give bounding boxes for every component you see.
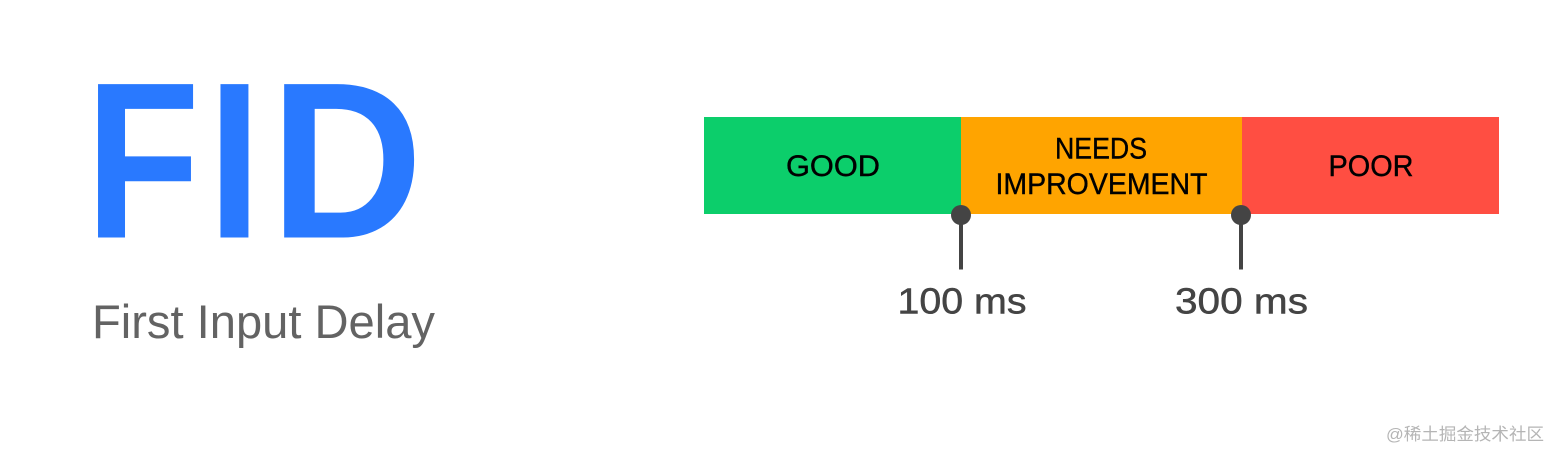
title: FID	[86, 36, 423, 286]
marker: 100 ms: 100 ms	[898, 280, 1026, 322]
segment: needs improvement: IMPROVEMENT	[996, 168, 1208, 201]
segment: poor	[1242, 117, 1499, 214]
marker: 300 ms	[1175, 205, 1308, 322]
segment: good	[704, 117, 961, 214]
marker: 100 ms	[898, 205, 1026, 322]
title: FID: F	[86, 36, 200, 285]
segment: poor: POOR	[1328, 150, 1414, 183]
title: FID: I	[208, 37, 261, 286]
subtitle: First Input Delay: First Input Delay	[92, 295, 435, 348]
segment: needs improvement	[961, 117, 1242, 214]
segment: needs improvement: NEEDS	[1055, 132, 1147, 165]
watermark: @稀土掘金技术社区	[1386, 425, 1544, 444]
marker: 300 ms: 300 ms	[1175, 280, 1308, 322]
segment: good: GOOD	[786, 150, 880, 183]
threshold bar	[704, 117, 1499, 214]
title: FID: D	[270, 37, 423, 286]
